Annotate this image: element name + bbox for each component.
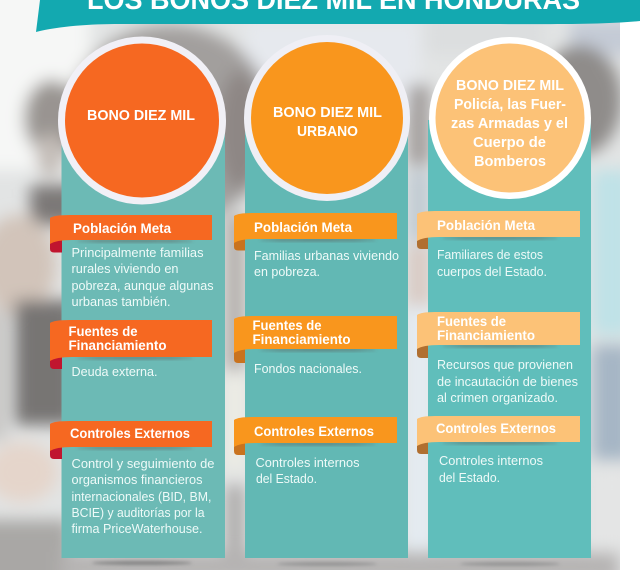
- text: Controles column 1: organismos financieros: [72, 472, 203, 487]
- text: Controles column 2: del Estado.: [256, 471, 317, 486]
- ribbon: Fuentes column 3: [417, 312, 580, 358]
- title banner: [36, 0, 640, 32]
- text: Controles column 1: firma PriceWaterhouse.: [72, 521, 202, 536]
- ribbon: Poblacion Meta column 2: [234, 213, 397, 250]
- panel: column 2: [245, 120, 408, 558]
- text: Fuentes column 1: Deuda externa.: [72, 364, 158, 379]
- circle: Bono Diez Mil Policia: Cuerpo de: [473, 134, 546, 151]
- ribbon: Fuentes column 3: Fuentes de: [437, 314, 506, 329]
- column shadows: [92, 561, 560, 566]
- text: Controles column 2: [256, 455, 360, 486]
- text: Poblacion Meta column 3: cuerpos del Estado.: [437, 264, 547, 279]
- text: Fuentes column 3: al crimen organizado.: [437, 390, 558, 405]
- ribbon: Fuentes column 2: Financiamiento: [252, 332, 350, 347]
- panel: column 3: [428, 120, 591, 558]
- circle: Bono Diez Mil Policia: BONO DIEZ MIL: [456, 77, 564, 94]
- text: Poblacion Meta column 2: [254, 248, 399, 279]
- circle: Bono Diez Mil Policia: [429, 37, 591, 199]
- text: Poblacion Meta column 1: Principalmente familias: [72, 245, 204, 260]
- circle: Bono Diez Mil: [58, 36, 226, 204]
- ribbon: Poblacion Meta column 2: Población Meta: [254, 220, 352, 235]
- circle: Bono Diez Mil Policia: zas Armadas y el: [451, 115, 568, 132]
- text: Poblacion Meta column 1: rurales viviendo en: [72, 261, 178, 276]
- ribbon: Controles column 1: Controles Externos: [70, 426, 190, 441]
- text: Controles column 3: del Estado.: [439, 470, 500, 485]
- circle: Bono Diez Mil Urbano: BONO DIEZ MIL: [273, 104, 382, 121]
- text: Fuentes column 3: de incautación de bienes: [437, 374, 578, 389]
- panel: column 1: [62, 120, 225, 558]
- ribbon: Controles column 2: [234, 417, 397, 455]
- text: Controles column 2: Controles internos: [256, 455, 360, 470]
- text: Poblacion Meta column 1: pobreza, aunque algunas: [72, 278, 214, 293]
- ribbon: Fuentes column 1: [50, 320, 212, 369]
- ribbon: Fuentes column 1: Financiamiento: [68, 338, 166, 353]
- ribbon: Controles column 1: [50, 421, 212, 459]
- ribbon: Poblacion Meta column 1: Población Meta: [73, 221, 171, 236]
- text: Poblacion Meta column 2: Familias urbanas viviendo: [254, 248, 399, 263]
- text: Poblacion Meta column 1: urbanas también.: [72, 294, 170, 309]
- ribbon: Poblacion Meta column 3: [417, 211, 580, 249]
- circle: Bono Diez Mil Policia: Bomberos: [474, 153, 546, 170]
- text: Controles column 3: [439, 453, 543, 485]
- ribbon: Controles column 3: [417, 416, 580, 454]
- text: Controles column 1: Control y seguimiento de: [72, 456, 214, 471]
- ribbon: Controles column 2: Controles Externos: [254, 424, 374, 439]
- circle: Bono Diez Mil Policia: Policía, las Fuer-: [454, 96, 566, 113]
- text: Controles column 1: internacionales (BID, BM,: [72, 489, 212, 504]
- ribbon: Poblacion Meta column 3: Población Meta: [437, 218, 535, 233]
- circle: Bono Diez Mil Urbano: [244, 35, 410, 201]
- text: Fuentes column 2: Fondos nacionales.: [254, 361, 362, 376]
- text: Controles column 1: [72, 456, 214, 536]
- ribbon: Fuentes column 3: Financiamiento: [437, 328, 535, 343]
- text: Controles column 1: BCIE) y auditorías por la: [72, 505, 205, 520]
- ribbon: Poblacion Meta column 1: [50, 215, 212, 252]
- ribbon: Controles column 3: Controles Externos: [436, 421, 556, 436]
- ribbon: Fuentes column 2: [234, 316, 397, 363]
- text: Controles column 3: Controles internos: [439, 453, 543, 468]
- ribbon: Fuentes column 2: Fuentes de: [252, 318, 322, 333]
- text: Poblacion Meta column 3: [437, 247, 547, 279]
- text: Fuentes column 3: Recursos que provienen: [437, 357, 573, 372]
- circle: Bono Diez Mil Urbano: URBANO: [297, 123, 358, 140]
- circle: Bono Diez Mil: BONO DIEZ MIL: [87, 107, 195, 124]
- text: Fuentes column 3: [437, 357, 578, 405]
- text: Poblacion Meta column 3: Familiares de estos: [437, 247, 543, 262]
- ribbon: Fuentes column 1: Fuentes de: [68, 324, 138, 339]
- text: Poblacion Meta column 2: en pobreza.: [254, 264, 320, 279]
- text: Poblacion Meta column 1: [72, 245, 214, 309]
